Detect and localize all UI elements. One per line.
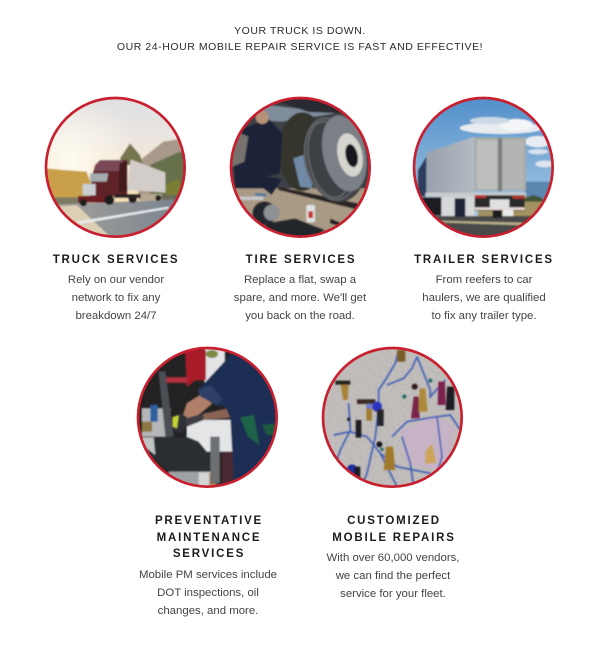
icon: mechanic photo circle — [136, 346, 278, 488]
text: truck services: breakdown 24/7 — [75, 310, 157, 322]
text: trailer services — [422, 274, 546, 322]
heading: preventative maintenance services: PREVENTATIVE — [155, 515, 263, 527]
icon: tire photo circle — [230, 96, 371, 238]
title — [117, 25, 483, 53]
text: preventative maintenance services: DOT inspections, oil — [157, 587, 259, 599]
heading: customized mobile repairs — [332, 515, 456, 544]
heading: customized mobile repairs: CUSTOMIZED — [347, 515, 441, 527]
heading: preventative maintenance services — [155, 515, 263, 560]
icon: truck photo circle — [44, 96, 186, 238]
text: customized mobile repairs: we can find the perfect — [336, 570, 450, 582]
icon: map with pins photo circle — [322, 346, 463, 488]
text: truck services: Rely on our vendor — [68, 274, 164, 286]
heading: customized mobile repairs: MOBILE REPAIRS — [332, 532, 456, 544]
text: tire services: you back on the road. — [245, 310, 355, 322]
heading: truck services: TRUCK SERVICES — [53, 254, 179, 266]
text: preventative maintenance services — [139, 569, 277, 617]
text: truck services: network to fix any — [72, 292, 160, 304]
text: tire services: Replace a flat, swap a — [244, 274, 356, 286]
text: preventative maintenance services: Mobile PM services include — [139, 569, 277, 581]
text: customized mobile repairs: With over 60,000 vendors, — [327, 552, 459, 564]
text: trailer services: haulers, we are qualified — [422, 292, 546, 304]
title: YOUR TRUCK IS DOWN. — [234, 25, 366, 37]
heading: tire services: TIRE SERVICES — [246, 254, 356, 266]
text: truck services — [68, 274, 164, 322]
text: tire services: spare, and more. We'll get — [234, 292, 366, 304]
text: tire services — [234, 274, 366, 322]
title: OUR 24-HOUR MOBILE REPAIR SERVICE IS FAST AND EFFECTIVE! — [117, 41, 483, 53]
text: customized mobile repairs: service for your fleet. — [340, 588, 446, 600]
heading: preventative maintenance services: MAINTENANCE — [157, 532, 261, 544]
text: customized mobile repairs — [326, 552, 459, 600]
icon: trailer photo circle — [412, 96, 554, 238]
heading: trailer services: TRAILER SERVICES — [414, 254, 554, 266]
text: trailer services: to fix any trailer type. — [431, 310, 537, 322]
text: preventative maintenance services: changes, and more. — [158, 605, 258, 617]
text: trailer services: From reefers to car — [436, 274, 532, 286]
heading: preventative maintenance services: SERVICES — [173, 548, 245, 560]
